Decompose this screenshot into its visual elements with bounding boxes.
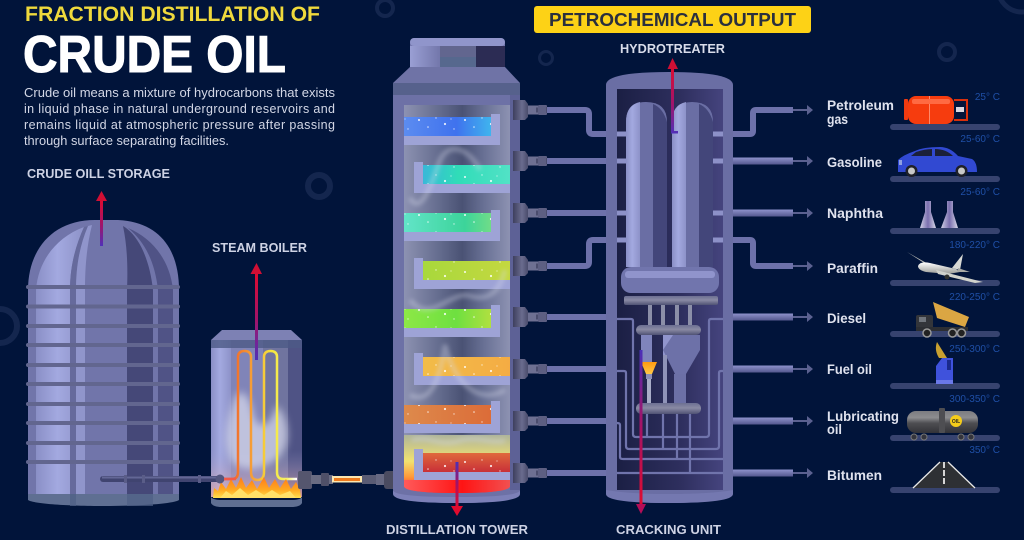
tray 1 [404, 114, 500, 145]
arrow: distillation tower [451, 462, 463, 516]
boiler base [211, 497, 302, 507]
pipe stubs around columns [617, 132, 723, 242]
tower window [404, 105, 510, 493]
temperatures: 350° C [969, 445, 1000, 456]
output pipes and arrows [733, 105, 813, 478]
petrochemical output header: PETROCHEMICAL OUTPUT [549, 10, 796, 30]
intro paragraph: Crude oil means a mixture of hydrocarbons that exists [24, 86, 335, 100]
arrow: cracking unit [636, 350, 646, 514]
icon: road [913, 462, 975, 488]
tray 6 [414, 353, 510, 385]
petrochemical output header [534, 6, 811, 33]
tray 2 [414, 162, 510, 193]
product names [827, 98, 899, 483]
hydrotreater right column [672, 102, 713, 267]
icon: car [898, 147, 977, 177]
tray 8 [414, 449, 510, 480]
collector drum [621, 267, 719, 293]
temperatures [949, 92, 1000, 456]
product names: oil [827, 422, 842, 437]
tower vapour [410, 149, 505, 443]
title: crude oil: CRUDE OIL [23, 26, 286, 84]
arrow: hydrotreater [668, 58, 678, 134]
temperatures: 25° C [975, 92, 1000, 103]
cracking unit [606, 72, 733, 503]
intro paragraph: through surface separating facilities. [24, 134, 229, 148]
label: crude oil storage: CRUDE OILL STORAGE [27, 167, 170, 181]
product names: Petroleum [827, 98, 894, 113]
product shelves [890, 124, 1000, 493]
label: cracking unit: CRACKING UNIT [616, 523, 721, 537]
riser tubes [648, 305, 692, 325]
arrow: steam boiler [250, 263, 262, 360]
tray 5 [404, 305, 500, 337]
product names: Diesel [827, 311, 866, 326]
cyclone separator [663, 335, 700, 403]
middle manifold [636, 325, 701, 335]
steam [226, 393, 287, 469]
temperatures: 220-250° C [949, 292, 1000, 303]
temperatures: 180-220° C [949, 240, 1000, 251]
lower manifold [636, 403, 701, 414]
tank hoops [26, 285, 180, 464]
icon: fuel jug [936, 342, 953, 384]
product names: Paraffin [827, 261, 878, 276]
hydrotreater left column [626, 102, 667, 267]
title: fraction distillation of: FRACTION DISTILLATION OF [25, 3, 320, 26]
pipes tower to cracking unit [547, 110, 626, 473]
icon: dump truck [916, 302, 969, 337]
bottom heat zone [404, 435, 510, 493]
feed pipe from storage to boiler [100, 474, 236, 484]
decorative rings [0, 0, 1024, 343]
heating coil [224, 351, 297, 480]
steam boiler [211, 330, 302, 507]
product names: Fuel oil [827, 362, 872, 377]
product names: gas [827, 112, 848, 127]
tray 3 [404, 210, 500, 241]
arrow: crude oil storage [96, 191, 107, 246]
label: distillation tower: DISTILLATION TOWER [386, 523, 528, 537]
intro paragraph: remains liquid at atmospheric pressure after passing [24, 118, 335, 132]
fire [213, 477, 301, 498]
distillation tower [393, 38, 520, 503]
product names: Gasoline [827, 155, 882, 170]
icon: tank wagon: OIL [952, 419, 960, 425]
temperatures: 300-350° C [949, 394, 1000, 405]
upper manifold [624, 296, 718, 305]
tray 7 [404, 401, 500, 433]
crude oil storage tank [26, 220, 180, 506]
tray 4 [414, 258, 510, 289]
icon: gas cylinder [904, 96, 967, 124]
product names: Lubricating [827, 409, 899, 424]
temperatures: 25-60° C [960, 134, 1000, 145]
reactor column with orange cone [641, 335, 657, 403]
product names: Naphtha [827, 206, 884, 221]
product names: Bitumen [827, 468, 882, 483]
transfer line from boiler to tower [298, 471, 399, 489]
title block [23, 3, 335, 148]
temperatures: 25-60° C [960, 187, 1000, 198]
icon: tank wagon [907, 408, 978, 440]
temperatures: 250-300° C [949, 344, 1000, 355]
label: hydrotreater: HYDROTREATER [620, 42, 725, 56]
icon: flasks [920, 201, 958, 228]
intro paragraph: in liquid phase in natural underground reservoirs and [24, 102, 335, 116]
outlet connectors on tower [513, 100, 549, 483]
intro paragraph [24, 86, 335, 148]
icon: airplane [907, 252, 983, 283]
label: steam boiler: STEAM BOILER [212, 241, 307, 255]
inner branch pipes [617, 319, 723, 473]
